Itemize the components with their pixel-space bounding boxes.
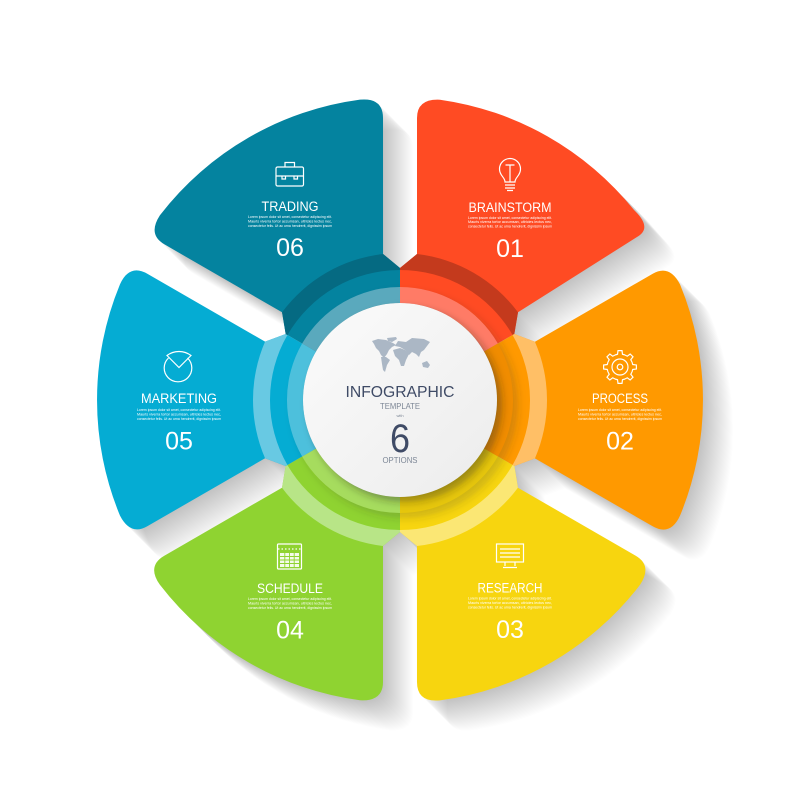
text block: process description: consectetur felis. Ut ac urna hendrerit, dignissim ipsum bbox=[578, 417, 662, 421]
text block: trading description: Lorem ipsum dolor sit amet, consectetur adipiscing elit. bbox=[248, 215, 332, 219]
text block: research description bbox=[468, 596, 552, 610]
number: 02: 02 bbox=[606, 428, 634, 456]
title: infographic: INFOGRAPHIC bbox=[346, 384, 454, 401]
panel: 02 process bbox=[400, 250, 783, 613]
panel: 04 schedule bbox=[154, 400, 400, 700]
text block: marketing description: Mauris viverra tortor accumsan, ultricies lectus nec, bbox=[137, 412, 221, 416]
text block: brainstorm description: Lorem ipsum dolor sit amet, consectetur adipiscing elit. bbox=[468, 216, 552, 220]
number: 01: 01 bbox=[496, 235, 524, 263]
text block: marketing description: Lorem ipsum dolor sit amet, consectetur adipiscing elit. bbox=[137, 408, 221, 412]
icon: pie envelope bbox=[164, 352, 192, 382]
inner translucent ring bbox=[253, 259, 547, 541]
text block: schedule description: Mauris viverra tortor accumsan, ultricies lectus nec, bbox=[248, 602, 332, 606]
centre hub bbox=[303, 303, 497, 497]
text block: brainstorm description: Mauris viverra tortor accumsan, ultricies lectus nec, bbox=[468, 220, 552, 224]
text block: research description: Mauris viverra tortor accumsan, ultricies lectus nec, bbox=[468, 601, 552, 605]
text block: trading description: consectetur felis. Ut ac urna hendrerit, dignissim ipsum bbox=[248, 224, 332, 228]
text block: process description: Mauris viverra tortor accumsan, ultricies lectus nec, bbox=[578, 412, 662, 416]
icon: briefcase bbox=[276, 162, 304, 186]
text block: process description bbox=[578, 408, 662, 421]
icon: monitor bbox=[496, 544, 524, 568]
heading: research: RESEARCH bbox=[478, 580, 542, 596]
text block: trading description: Mauris viverra tortor accumsan, ultricies lectus nec, bbox=[248, 220, 332, 224]
text block: schedule description bbox=[248, 597, 332, 610]
text block: process description: Lorem ipsum dolor sit amet, consectetur adipiscing elit. bbox=[578, 408, 662, 412]
heading: schedule: SCHEDULE bbox=[257, 581, 323, 596]
text block: schedule description: Lorem ipsum dolor sit amet, consectetur adipiscing elit. bbox=[248, 597, 332, 601]
text block: research description: Lorem ipsum dolor sit amet, consectetur adipiscing elit. bbox=[468, 596, 552, 600]
heading: brainstorm: BRAINSTORM bbox=[468, 200, 552, 215]
number: 05: 05 bbox=[165, 428, 193, 456]
text block: marketing description bbox=[137, 408, 221, 421]
ring shadow bbox=[292, 292, 518, 518]
text block: brainstorm description: consectetur felis. Ut ac urna hendrerit, dignissim ipsum bbox=[468, 224, 552, 228]
panel: 01 brainstorm bbox=[400, 100, 644, 400]
panel: 06 trading bbox=[140, 37, 523, 400]
label: options: OPTIONS bbox=[382, 456, 418, 465]
number: 03: 03 bbox=[496, 616, 524, 644]
text block: brainstorm description bbox=[468, 216, 552, 228]
icon: gear bbox=[604, 351, 636, 383]
icon: calendar bbox=[278, 544, 302, 569]
heading: marketing: MARKETING bbox=[141, 391, 217, 406]
panel: 03 research bbox=[277, 400, 660, 763]
icon: light bulb bbox=[500, 158, 520, 190]
text block: research description: consectetur felis. Ut ac urna hendrerit, dignissim ipsum bbox=[468, 606, 552, 610]
text block: schedule description: consectetur felis. Ut ac urna hendrerit, dignissim ipsum bbox=[248, 606, 332, 610]
text block: marketing description: consectetur felis. Ut ac urna hendrerit, dignissim ipsum bbox=[137, 417, 221, 421]
icon: world map bbox=[372, 337, 430, 372]
heading: process: PROCESS bbox=[592, 391, 648, 406]
heading: trading: TRADING bbox=[262, 199, 318, 214]
subtitle: template: TEMPLATE bbox=[380, 401, 420, 411]
hub shadow bbox=[308, 308, 502, 502]
number: 6: 6 bbox=[390, 417, 410, 461]
label: with: with bbox=[396, 413, 404, 418]
text block: trading description bbox=[248, 215, 332, 228]
panel: 05 marketing bbox=[17, 187, 400, 550]
number: 06: 06 bbox=[276, 234, 304, 262]
number: 04: 04 bbox=[276, 616, 304, 644]
